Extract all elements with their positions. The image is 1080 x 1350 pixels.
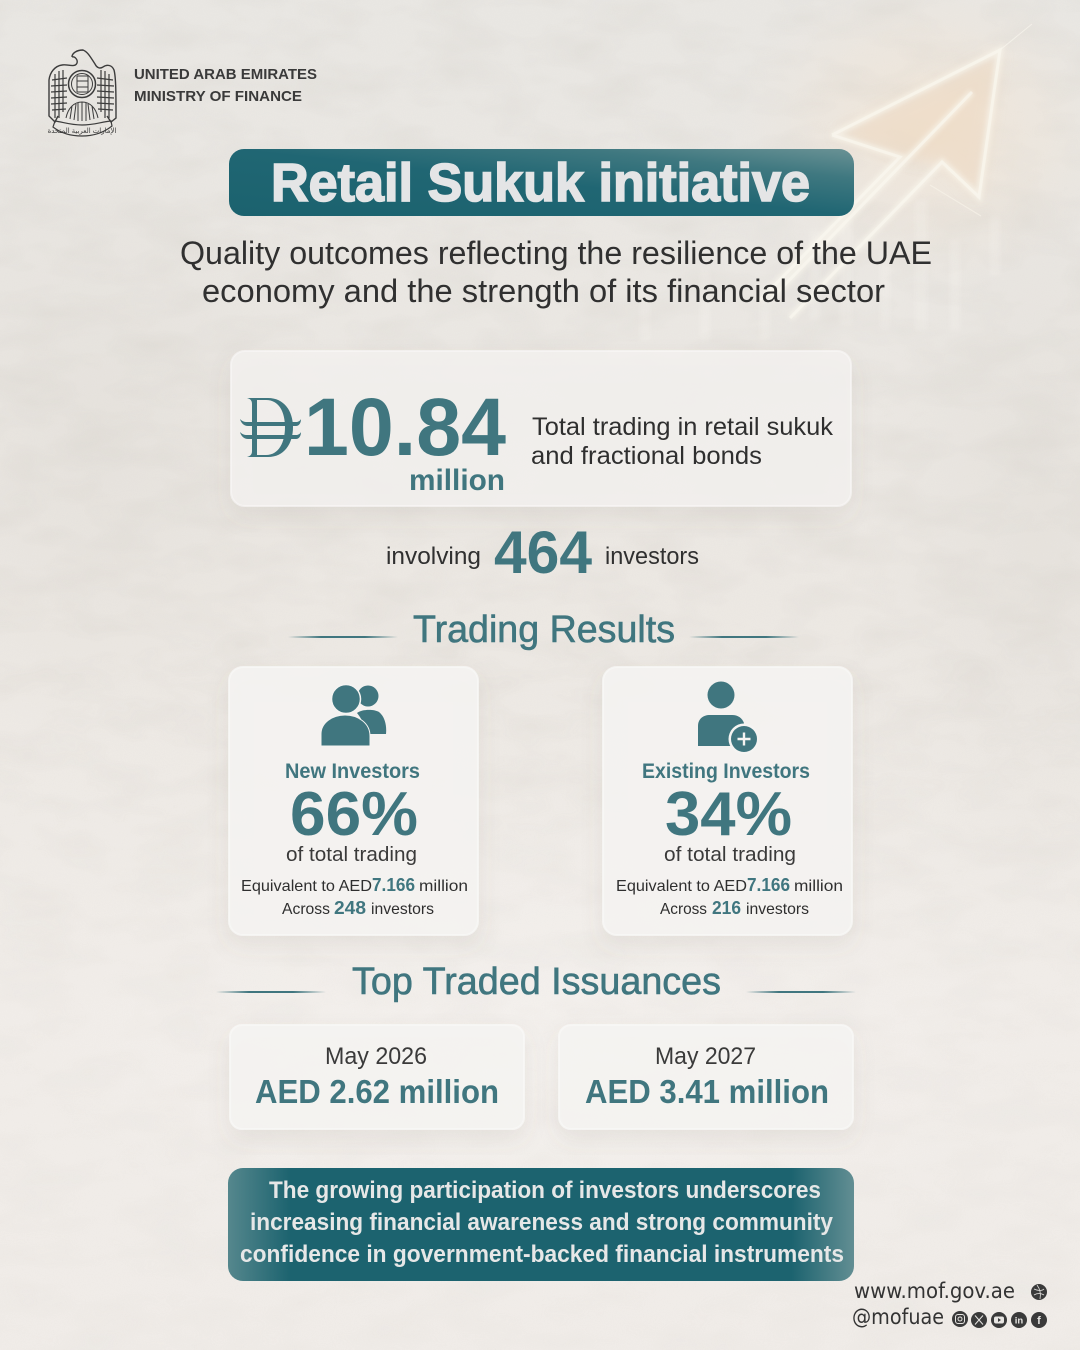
details: [241, 875, 468, 918]
details: Across: [282, 901, 330, 918]
icon: x: [971, 1312, 987, 1328]
closing statement banner: [228, 1168, 854, 1281]
icon: two people: [321, 684, 386, 746]
closing statement banner: increasing financial awareness and strong community: [250, 1209, 834, 1236]
title banner: Retail Sukuk initiative: [271, 153, 810, 213]
investors count line: [386, 519, 699, 586]
label: New Investors: [285, 760, 420, 783]
panel: new investors: [229, 667, 478, 935]
panel: may 2027 issuance: May 2027: [655, 1043, 756, 1070]
details: Equivalent to AED: [616, 878, 747, 895]
ministry name: MINISTRY OF FINANCE: [134, 88, 302, 105]
caption: of total trading: [664, 844, 796, 866]
icon: globe: [1031, 1284, 1047, 1300]
description: [531, 413, 834, 470]
details: 248: [334, 898, 366, 918]
heading: top traded issuances: Top Traded Issuances: [352, 961, 721, 1003]
panel: may 2026 issuance: [230, 1025, 524, 1129]
details: million: [794, 878, 843, 895]
icon: youtube: [991, 1312, 1007, 1328]
ministry name: UNITED ARAB EMIRATES: [134, 66, 317, 83]
background arrow graphic: [760, 24, 1032, 318]
closing statement banner: The growing participation of investors underscores: [269, 1177, 821, 1204]
subtitle: [180, 235, 932, 309]
icon: dirham sign: [240, 398, 301, 457]
panel: may 2026 issuance: AED 2.62 million: [255, 1073, 499, 1110]
caption: of total trading: [286, 844, 417, 866]
percentage: 34%: [665, 780, 792, 849]
details: 7.166: [372, 875, 415, 895]
description: Total trading in retail sukuk: [532, 413, 834, 441]
emblem: UAE coat of arms: [48, 50, 116, 136]
details: million: [419, 878, 468, 895]
details: Across: [660, 901, 707, 918]
icon: linkedin: [1011, 1312, 1027, 1328]
contact: website: www.mof.gov.ae: [854, 1279, 1015, 1303]
contact: social handle: [852, 1305, 1047, 1329]
subtitle: economy and the strength of its financial sector: [202, 273, 885, 309]
icon: linkedin: in: [1015, 1316, 1023, 1326]
panel: existing investors: [603, 667, 852, 935]
investors count line: involving: [386, 543, 481, 570]
details: investors: [746, 901, 809, 918]
details: 216: [712, 898, 741, 918]
icon: facebook: [1031, 1312, 1047, 1328]
panel: may 2026 issuance: May 2026: [325, 1043, 427, 1070]
unit: million: [409, 464, 505, 497]
ministry name: [134, 66, 317, 105]
percentage: 66%: [290, 780, 418, 849]
investors count line: 464: [494, 519, 593, 586]
contact: social handle: @mofuae: [852, 1305, 944, 1329]
closing statement banner: confidence in government-backed financial instruments: [240, 1241, 844, 1268]
details: investors: [371, 901, 434, 918]
label: Existing Investors: [642, 760, 810, 783]
icon: instagram: [952, 1311, 968, 1327]
details: 7.166: [747, 875, 790, 895]
heading: trading results: Trading Results: [413, 609, 675, 651]
details: Equivalent to AED: [241, 878, 372, 895]
details: [616, 875, 843, 918]
total amount: 10.84: [304, 382, 506, 473]
panel: total trading: [231, 351, 851, 506]
icon: facebook: f: [1037, 1315, 1041, 1327]
panel: may 2027 issuance: AED 3.41 million: [585, 1073, 829, 1110]
panel: may 2027 issuance: [559, 1025, 853, 1129]
investors count line: investors: [605, 543, 699, 570]
icon: person with plus: [698, 682, 760, 754]
emblem motto: الإمارات العربية المتحدة: [48, 128, 116, 135]
subtitle: Quality outcomes reflecting the resilience of the UAE: [180, 235, 932, 271]
description: and fractional bonds: [531, 442, 762, 470]
